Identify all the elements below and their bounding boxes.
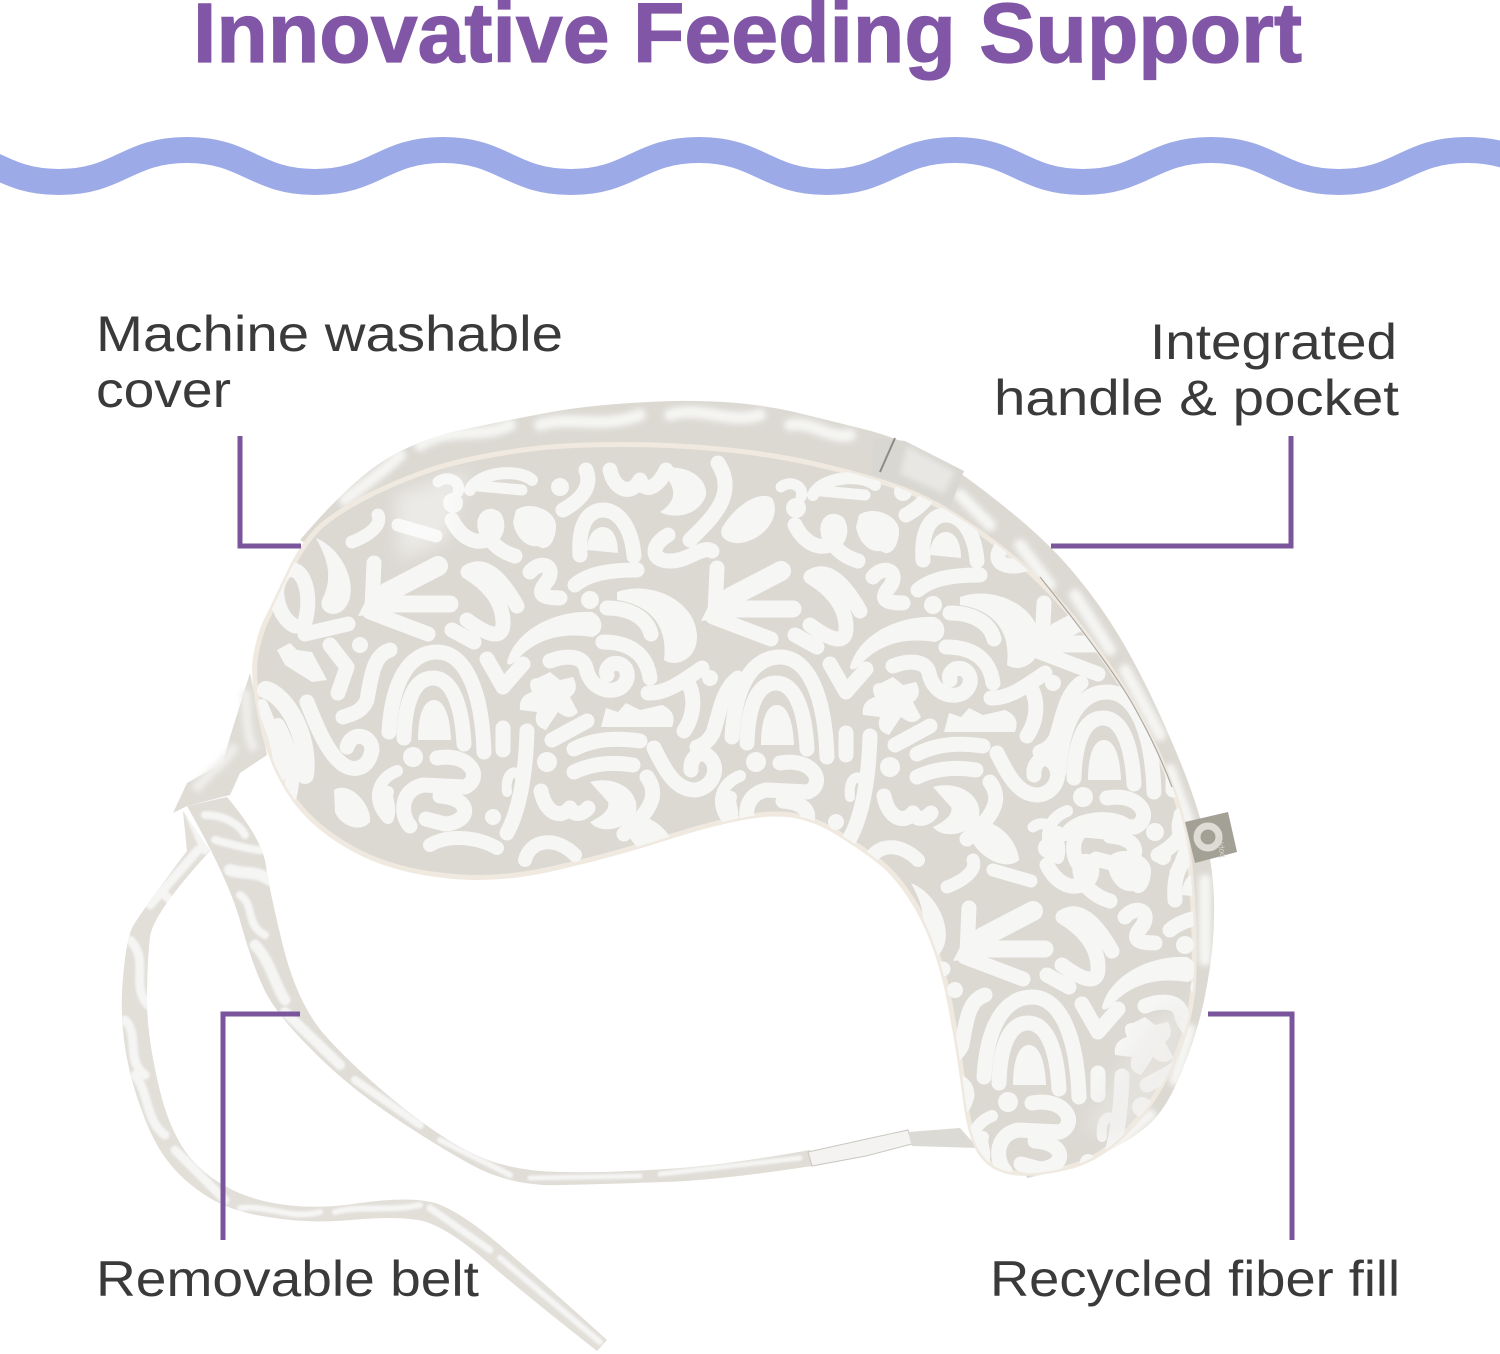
wavy divider — [0, 150, 1500, 182]
belt: upper attachment to pillow — [173, 673, 267, 813]
label: integrated handle and pocket: Integrated — [1150, 314, 1397, 370]
pillow: front face — [252, 442, 1196, 1176]
pillow: repeating doodle print — [257, 456, 1227, 1174]
callout line: integrated handle and pocket — [1051, 436, 1291, 546]
pillow: back gusset band — [300, 401, 1214, 1178]
callout line: removable belt — [223, 1014, 300, 1240]
label: removable belt: Removable belt — [96, 1251, 479, 1307]
callout line: machine washable cover — [240, 436, 301, 546]
belt: buckle clip — [808, 1128, 978, 1166]
callout line: recycled fiber fill — [1208, 1014, 1292, 1240]
pillow: brand tag: boppy — [1214, 835, 1227, 858]
pillow: integrated handle — [872, 437, 964, 507]
belt: long loose strap — [122, 811, 607, 1351]
label: recycled fiber fill: Recycled fiber fill — [990, 1251, 1400, 1307]
belt: strap to buckle — [187, 797, 812, 1185]
label: machine washable cover: Machine washable — [96, 306, 563, 362]
label: integrated handle and pocket: handle & pocket — [994, 370, 1399, 426]
belt straps — [122, 673, 978, 1351]
label: machine washable cover: cover — [96, 362, 231, 418]
pillow — [252, 400, 1237, 1178]
pillow: brand tag — [1185, 812, 1237, 863]
